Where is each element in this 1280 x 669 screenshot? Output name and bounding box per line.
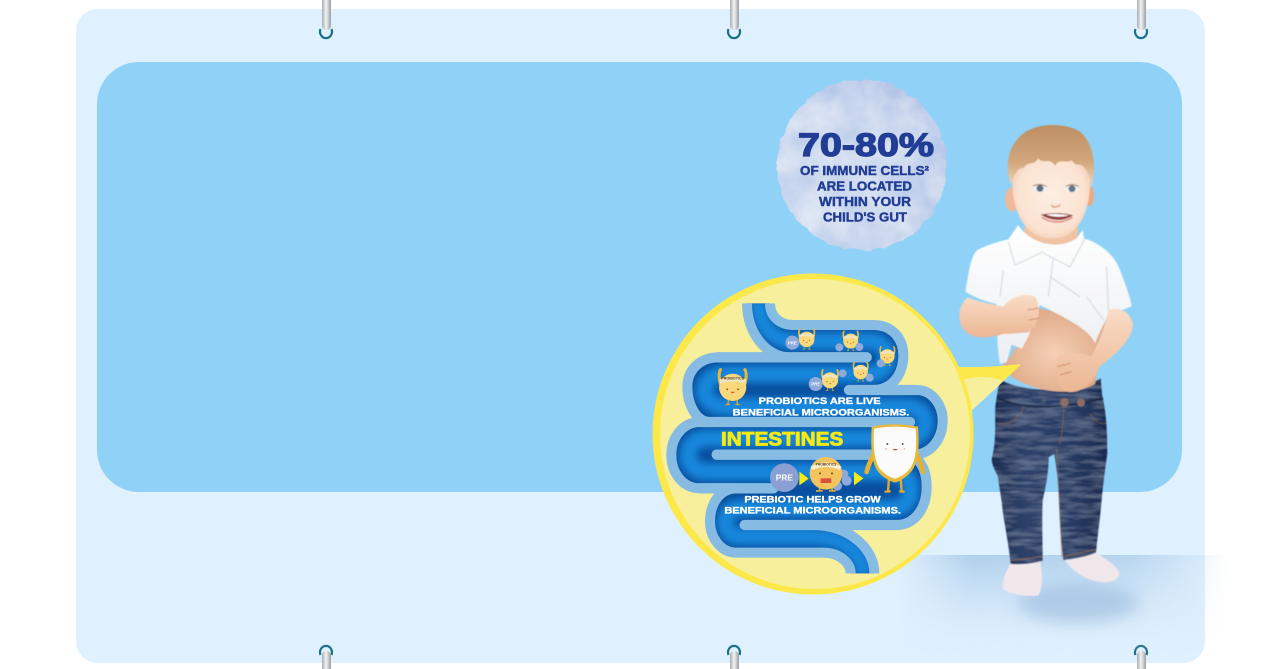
- probiotics caption: PROBIOTICS ARE LIVE: [759, 396, 881, 406]
- bubble tail: [940, 352, 1021, 412]
- torso and arms: [959, 225, 1133, 392]
- panel: inner blue card: [97, 62, 1182, 492]
- pre icon: PRE: [776, 473, 793, 483]
- headline stat: 70-80%: [798, 127, 934, 163]
- intestine diagram: [671, 300, 943, 577]
- pre bubble: PRE: [788, 340, 797, 345]
- prebiotic caption: [724, 494, 901, 516]
- growing probiotic character: [810, 457, 852, 491]
- stat caption: WITHIN YOUR: [819, 194, 912, 209]
- shield character: [867, 424, 923, 492]
- intestine tube: [671, 300, 943, 577]
- binder ring: bottom right: [1135, 646, 1147, 669]
- stat badge: watercolor circle: [777, 80, 947, 250]
- probiotic character: [853, 363, 868, 381]
- ears: [1005, 187, 1020, 211]
- growing probiotic character: PROBIOTICS: [816, 463, 837, 467]
- stat caption: CHILD'S GUT: [823, 210, 907, 224]
- prebiotic caption: PREBIOTIC HELPS GROW: [744, 494, 881, 504]
- arrow: probiotic to shield: [854, 472, 863, 485]
- neck: [1024, 227, 1078, 257]
- face: [1012, 150, 1090, 238]
- title: intestines: INTESTINES: [721, 430, 843, 451]
- watercolor blob: [777, 80, 947, 250]
- probiotic character: [822, 370, 838, 391]
- shield legs: [885, 478, 905, 492]
- bubble tail highlight: [955, 364, 1021, 381]
- probiotics caption: [733, 396, 909, 417]
- belly: [1003, 307, 1105, 392]
- shield arms: [867, 452, 923, 472]
- pre dot: [835, 343, 843, 351]
- prebiotic caption: BENEFICIAL MICROORGANISMS.: [724, 506, 901, 516]
- probiotic character: [799, 329, 814, 349]
- jeans detail: stitching and buttons: [997, 397, 1106, 561]
- probiotic character: [880, 347, 895, 366]
- stat caption: OF IMMUNE CELLS²: [800, 163, 930, 178]
- child figure: [959, 125, 1133, 596]
- arm: child's right: [959, 295, 1039, 337]
- pre bubble: PRE: [811, 382, 820, 387]
- eyes: [1033, 184, 1079, 192]
- binder ring: top right: [1135, 0, 1147, 38]
- binder ring: bottom centre: [728, 646, 740, 669]
- speech bubble with intestine diagram: [652, 274, 1021, 594]
- shield body: [871, 424, 919, 483]
- stat caption: ARE LOCATED: [817, 178, 912, 194]
- probiotic character: [843, 331, 858, 351]
- arm: child's left: [1056, 309, 1133, 392]
- head: [1005, 125, 1094, 238]
- hair: [1008, 125, 1094, 187]
- large probiotic character: PROBIOTICS: [721, 377, 745, 381]
- shirt folds: [1000, 238, 1108, 320]
- pre dot: [866, 374, 874, 382]
- shield face: [885, 443, 905, 450]
- binder ring: bottom left: [320, 646, 332, 669]
- pre dot: [839, 369, 847, 377]
- floor shadow under the child: [912, 555, 1212, 650]
- stat caption: [800, 163, 930, 224]
- binder ring: top left: [320, 0, 332, 38]
- bubble fill: [660, 279, 970, 589]
- large probiotic character: [719, 370, 746, 405]
- sock: left foot: [1003, 561, 1042, 596]
- pre dot: [877, 359, 885, 367]
- jeans: [992, 379, 1107, 564]
- nose: [1051, 205, 1061, 207]
- bubble rim: [652, 274, 974, 594]
- sock: right foot: [1064, 552, 1119, 582]
- ring binder clips: [320, 0, 1147, 669]
- pre dot: [855, 343, 863, 351]
- probiotics caption: BENEFICIAL MICROORGANISMS.: [733, 407, 909, 417]
- smile: [1041, 213, 1073, 222]
- small probiotic characters: [785, 329, 895, 391]
- pre icon: [770, 463, 799, 492]
- binder ring: top centre: [728, 0, 740, 38]
- arrow: pre to probiotic: [799, 472, 809, 485]
- jeans and socks: [992, 379, 1119, 596]
- polo shirt: [965, 225, 1132, 364]
